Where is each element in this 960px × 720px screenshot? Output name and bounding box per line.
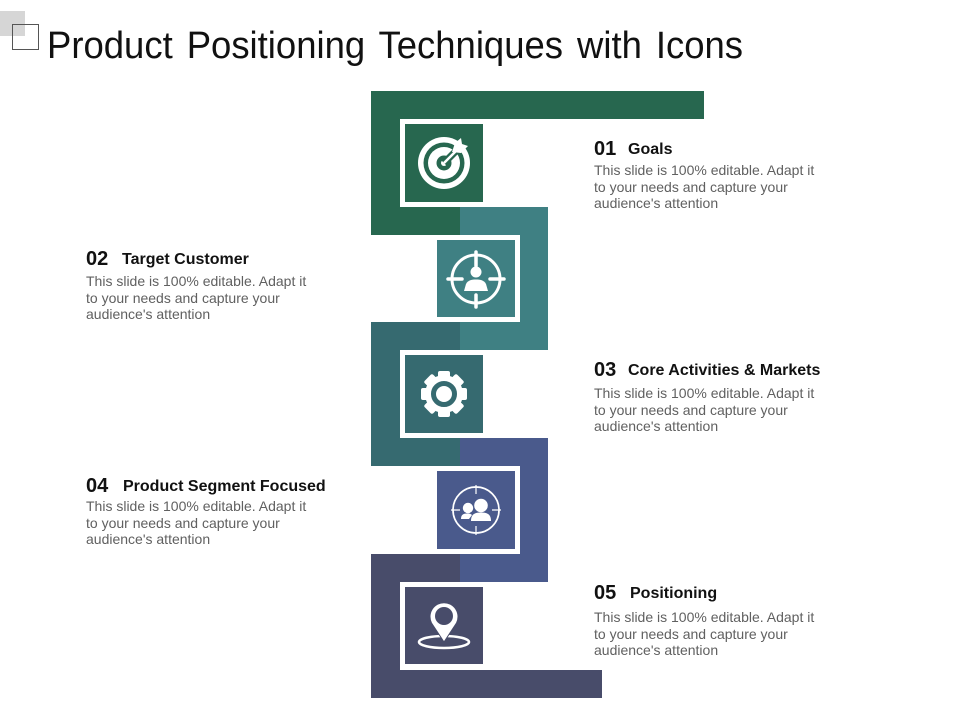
band 5: positioning xyxy=(371,554,602,698)
decorative corner squares xyxy=(0,11,39,50)
text block 03: core activities and markets: 03 xyxy=(594,359,616,381)
text block 01: goals: Goals xyxy=(628,141,672,158)
text block 02: target customer xyxy=(86,248,306,322)
band 1: goals xyxy=(371,91,704,235)
text block 04: product segment focused: 04 xyxy=(86,475,108,497)
text block 01: goals xyxy=(594,138,814,211)
text block 01: goals: 01 xyxy=(594,138,616,160)
text block 05: positioning: 05 xyxy=(594,582,616,604)
text block 02: target customer: This slide is 100% editable. Adapt it to your needs and capture your audience's attention xyxy=(86,273,306,322)
icon tile 2: person in crosshair xyxy=(437,240,515,317)
band 4: product segment xyxy=(460,438,548,582)
text block 01: goals: This slide is 100% editable. Adapt it to your needs and capture your audience's attention xyxy=(594,162,814,211)
icon tile 5: map pin on ring xyxy=(405,587,483,664)
text block 03: core activities and markets: This slide is 100% editable. Adapt it to your needs and capture your audience's attention xyxy=(594,385,814,434)
text block 02: target customer: Target Customer xyxy=(122,251,249,268)
icon tile 4: group in crosshair xyxy=(437,471,515,549)
title: Product Positioning Techniques with Icons xyxy=(47,25,743,67)
band 2: target customer xyxy=(460,207,548,350)
text block 04: product segment focused: Product Segment Focused xyxy=(123,478,326,495)
text block 03: core activities and markets xyxy=(594,359,820,434)
text block 02: target customer: 02 xyxy=(86,248,108,270)
icon tile 1: target with arrow xyxy=(405,124,483,202)
text block 05: positioning: This slide is 100% editable. Adapt it to your needs and capture your audience's attention xyxy=(594,609,814,658)
icon tile 3: gear xyxy=(405,355,483,433)
band 3: core activities xyxy=(371,322,460,466)
text block 04: product segment focused: This slide is 100% editable. Adapt it to your needs and capture your audience's attention xyxy=(86,498,306,547)
text block 04: product segment focused xyxy=(86,475,326,547)
text block 05: positioning: Positioning xyxy=(630,585,717,602)
text block 03: core activities and markets: Core Activities & Markets xyxy=(628,362,820,379)
text block 05: positioning xyxy=(594,582,814,658)
